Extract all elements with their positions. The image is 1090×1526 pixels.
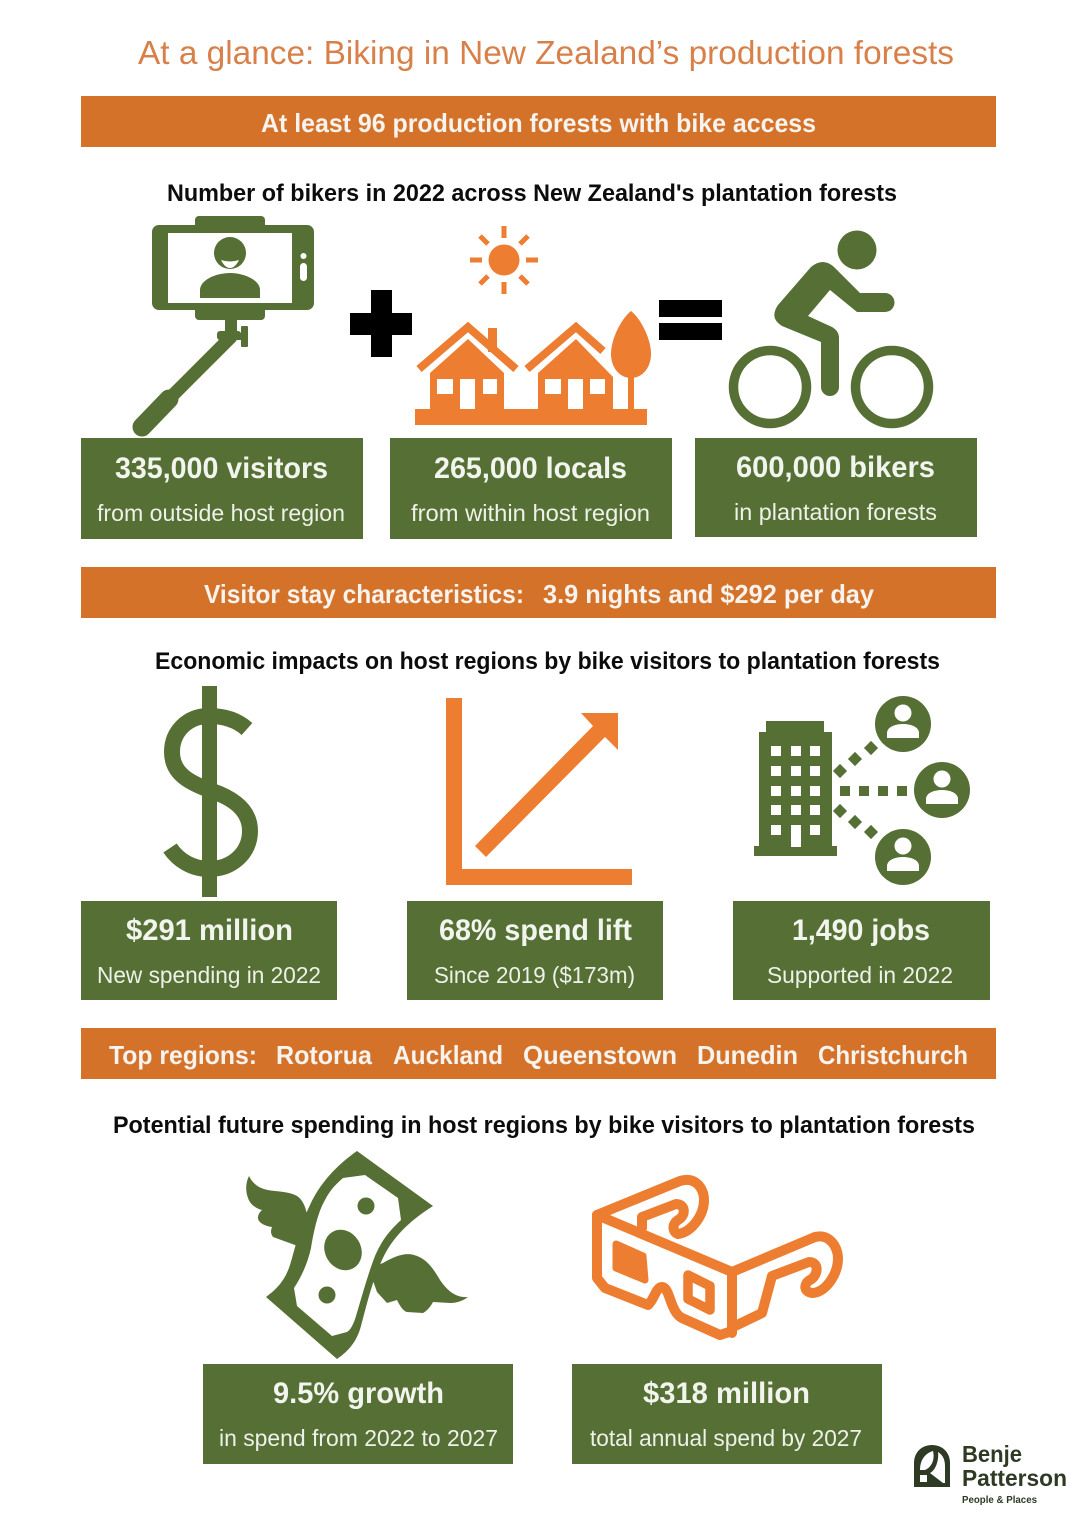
icon: equals sign <box>659 300 722 340</box>
banner: forests with bike access: At least 96 production forests with bike access <box>261 108 816 138</box>
banner: forests with bike access <box>81 96 996 147</box>
title: At a glance: Biking in New Zealand’s production forests <box>138 34 954 71</box>
stat box: visitors: from outside host region <box>97 500 345 526</box>
stat box: locals: 265,000 locals <box>434 452 627 485</box>
icon: plus sign <box>350 290 412 357</box>
stat box: bikers: 600,000 bikers <box>736 451 935 484</box>
heading: potential future spending: Potential future spending in host regions by bike visitors to plantation forests <box>113 1112 975 1139</box>
stat box: new spending: New spending in 2022 <box>97 962 321 988</box>
icon: 3D glasses <box>597 1180 838 1335</box>
stat box: locals <box>390 438 672 539</box>
icon: growth chart arrow <box>446 698 632 885</box>
stat box: new spending: $291 million <box>126 914 293 947</box>
banner: visitor stay characteristics <box>81 567 996 618</box>
logo: Benje Patterson: People & Places <box>962 1495 1037 1506</box>
logo: Benje Patterson: Patterson <box>962 1465 1067 1491</box>
stat box: locals: from within host region <box>411 500 650 526</box>
heading: number of bikers: Number of bikers in 2022 across New Zealand's plantation forests <box>167 180 897 207</box>
stat box: growth: 9.5% growth <box>273 1377 444 1410</box>
icon: selfie stick <box>142 216 314 427</box>
banner: top regions: Auckland <box>393 1040 503 1070</box>
logo: Benje Patterson: Benje <box>962 1441 1022 1467</box>
stat box: total annual spend: $318 million <box>643 1377 810 1410</box>
icon: dollar sign <box>170 686 250 897</box>
banner: top regions: Dunedin <box>697 1040 798 1070</box>
icon: money with wings <box>246 1151 468 1359</box>
banner: top regions: Top regions: <box>109 1040 257 1070</box>
banner: top regions <box>81 1028 996 1079</box>
stat box: visitors: 335,000 visitors <box>115 452 328 485</box>
stat box: spend lift: 68% spend lift <box>439 914 632 947</box>
stat box: new spending <box>81 901 337 1000</box>
icon: building connected to people <box>754 696 970 885</box>
stat box: bikers: in plantation forests <box>734 499 937 525</box>
stat box: spend lift: Since 2019 ($173m) <box>434 962 635 988</box>
stat box: visitors <box>81 438 363 539</box>
stat box: growth <box>203 1364 513 1464</box>
stat box: growth: in spend from 2022 to 2027 <box>219 1425 498 1451</box>
banner: top regions: Queenstown <box>523 1040 677 1070</box>
stat box: jobs: Supported in 2022 <box>767 962 953 988</box>
banner: visitor stay characteristics: Visitor stay characteristics: <box>204 579 524 609</box>
stat box: bikers <box>695 438 977 537</box>
stat box: jobs: 1,490 jobs <box>792 914 930 947</box>
stat box: total annual spend: total annual spend by 2027 <box>590 1425 862 1451</box>
heading: economic impacts: Economic impacts on host regions by bike visitors to plantation forests <box>155 648 940 675</box>
stat box: total annual spend <box>572 1364 882 1464</box>
logo: Benje Patterson <box>914 1441 1067 1506</box>
stat box: jobs <box>733 901 990 1000</box>
icon: houses and tree <box>415 311 651 425</box>
banner: top regions: Christchurch <box>818 1040 968 1070</box>
banner: visitor stay characteristics: 3.9 nights and $292 per day <box>543 579 875 609</box>
banner: top regions: Rotorua <box>276 1040 373 1070</box>
icon: sun <box>470 226 538 294</box>
stat box: spend lift <box>407 901 663 1000</box>
icon: cyclist <box>734 230 928 424</box>
